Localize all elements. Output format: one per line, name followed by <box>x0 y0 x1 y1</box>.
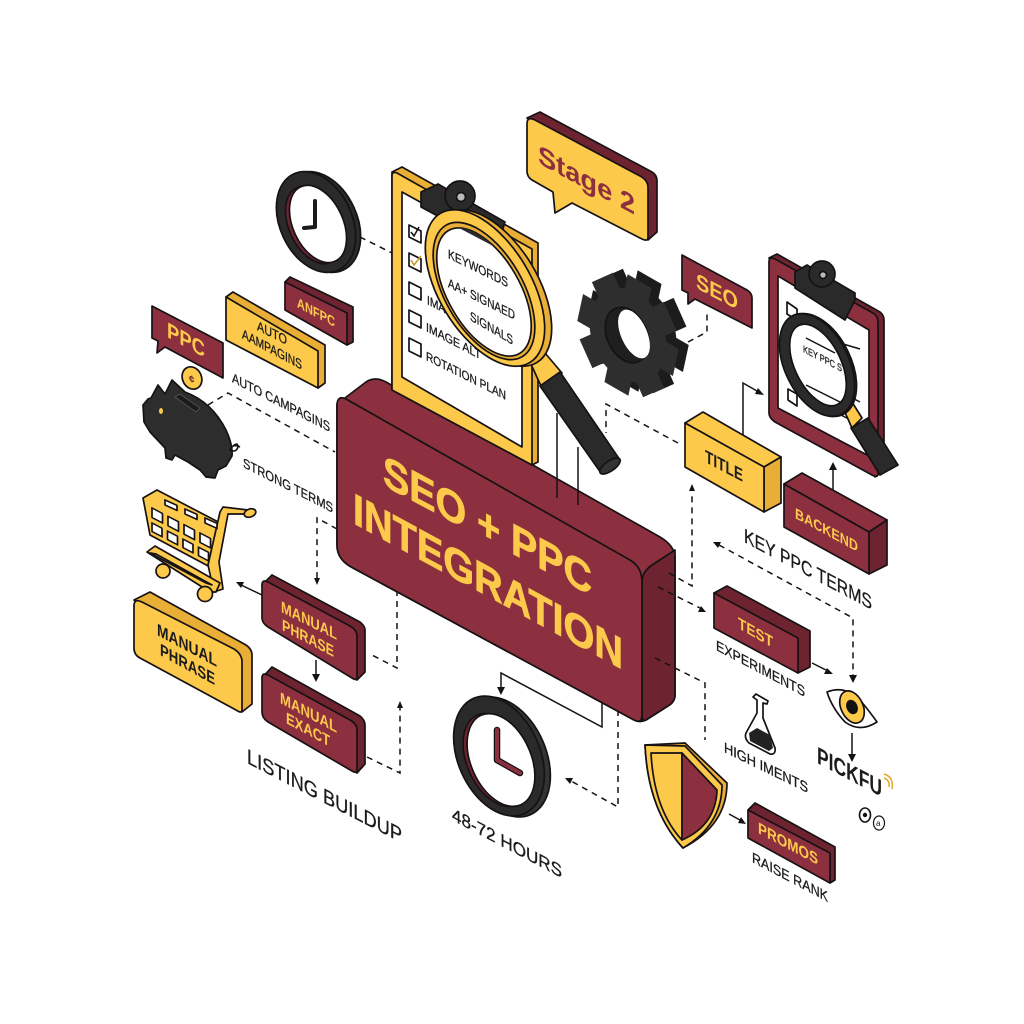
label box: Manual Exact: MANUAL <box>280 689 337 737</box>
connector lines over block side <box>655 492 706 740</box>
label box: Title: TITLE <box>705 447 743 487</box>
label box: Manual Exact: EXACT <box>286 708 330 751</box>
callout: PPC <box>152 306 223 378</box>
callout: SEO: SEO <box>696 268 738 315</box>
label box: Manual Phrase maroon <box>262 575 365 680</box>
clock hands <box>304 201 315 228</box>
checklist labels: I <box>427 236 430 252</box>
cart grid <box>152 508 210 562</box>
label box: ANFPC <box>285 277 353 345</box>
label box: Manual Phrase yellow: MANUAL <box>157 620 217 671</box>
label box: Title <box>685 412 781 512</box>
checkboxes <box>409 225 421 357</box>
label: PickFu: PICKFU <box>817 742 882 803</box>
icon: coin <box>179 364 205 392</box>
magnifier: black: KEY PPC S <box>803 344 842 375</box>
icon: gear <box>560 255 706 411</box>
label box: Manual Phrase yellow: PHRASE <box>160 639 215 689</box>
checklist labels: IMAGE ALT <box>426 320 481 362</box>
small clock <box>261 159 376 285</box>
label box: Promos: PROMOS <box>758 819 818 869</box>
label box: Manual Phrase maroon: PHRASE <box>282 616 334 661</box>
title: line two: INTEGRATION <box>353 483 623 679</box>
magnifier: yellow <box>424 209 622 475</box>
icon: signal arcs <box>884 774 892 789</box>
label box: Manual Exact <box>262 667 365 773</box>
clipboard: yellow checklist <box>392 167 538 465</box>
checklist labels: IMAGE <box>427 293 460 324</box>
label box: Auto Campaigns <box>226 292 325 388</box>
callout: Stage 2 <box>527 112 657 240</box>
label box: Auto Campaigns: AAMPAGINS <box>242 327 302 374</box>
checklist labels: ROTATION PLAN <box>426 349 506 403</box>
callout: SEO <box>682 255 752 328</box>
lens text <box>448 247 515 348</box>
magnifier handle <box>530 353 623 477</box>
label box: ANFPC: ANFPC <box>297 295 335 331</box>
large clock <box>436 682 568 831</box>
label box: Manual Phrase yellow <box>134 592 252 712</box>
icon: piggy bank <box>143 380 240 478</box>
icon: flask <box>745 694 775 754</box>
connector lines <box>208 237 857 824</box>
icon: shopping cart <box>143 490 257 602</box>
label: 48-72 hours: 48-72 HOURS <box>452 805 562 883</box>
label box: Promos <box>748 803 835 883</box>
label: Experiments: EXPERIMENTS <box>716 638 805 701</box>
label box: Auto Campaigns: AUTO <box>257 319 287 349</box>
checkboxes and lines <box>787 302 860 425</box>
clipboard: maroon <box>764 254 898 477</box>
label: High Iments: HIGH IMENTS <box>724 740 808 797</box>
callout text: Stage 2 <box>538 140 635 222</box>
checklist labels <box>426 236 506 403</box>
clip <box>795 261 855 320</box>
block lines over face <box>557 413 578 505</box>
label: Listing Buildup: LISTING BUILDUP <box>247 744 402 848</box>
title: line one: SEO + PPC <box>383 445 592 605</box>
small ring icons: a <box>876 819 881 828</box>
label: Raise Rank: RAISE RANK <box>752 850 829 906</box>
callout: PPC: PPC <box>167 318 205 363</box>
lens text: AA+ SIGNAED <box>448 276 515 323</box>
lens text: KEYWORDS <box>448 247 508 290</box>
lens text: SIGNALS <box>470 308 513 348</box>
label: Auto Campaigns: AUTO CAMPAGINS <box>232 371 330 436</box>
small ring icons <box>860 808 884 830</box>
label box: Backend: BACKEND <box>795 505 858 556</box>
label: Strong Terms: STRONG TERMS <box>243 456 333 517</box>
icon: eye <box>827 687 877 728</box>
label box: Test: TEST <box>738 613 773 652</box>
magnifier: black <box>764 302 898 475</box>
central block: SEO + PPC Integration <box>337 379 675 722</box>
clipboard clip <box>421 181 505 248</box>
icon: shield <box>645 743 727 848</box>
icon: coin: ¢ <box>189 373 195 387</box>
clock hands <box>497 730 520 773</box>
label box: Backend <box>784 473 887 574</box>
label: Key PPC Terms: KEY PPC TERMS <box>744 524 872 615</box>
label box: Manual Phrase maroon: MANUAL <box>281 598 337 644</box>
label box: Test <box>714 586 810 673</box>
